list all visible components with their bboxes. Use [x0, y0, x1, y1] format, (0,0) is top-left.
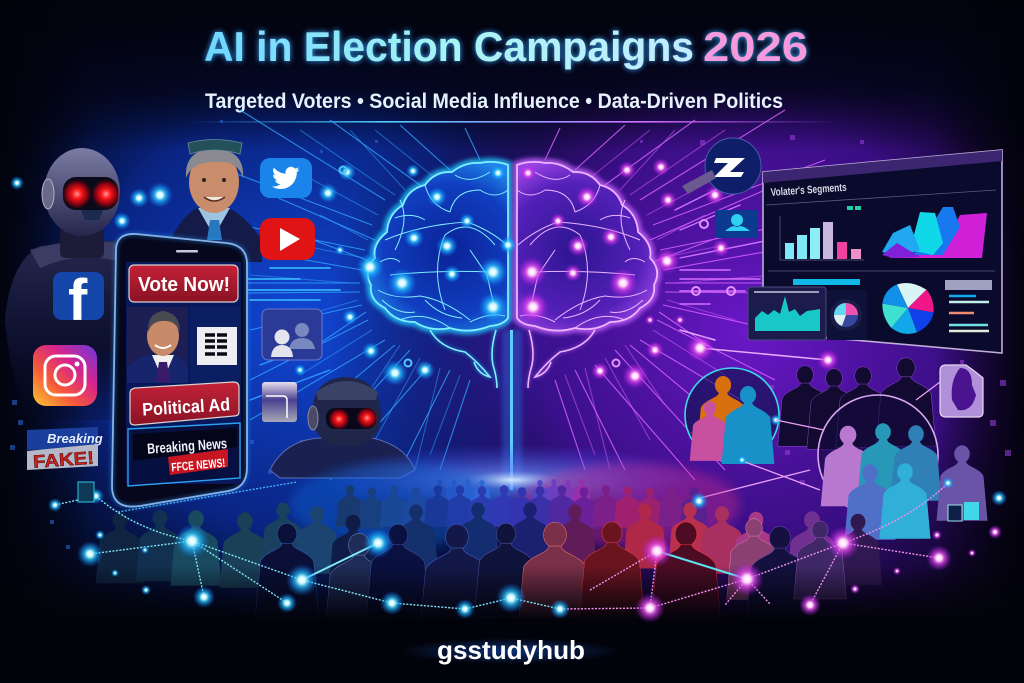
area chart — [882, 207, 987, 258]
icon: twitter — [260, 158, 312, 198]
chart legend — [945, 280, 992, 331]
banner: vote now: Vote Now! — [138, 274, 230, 296]
wordmark: gsstudyhub — [437, 635, 585, 665]
icon: misc tile — [262, 382, 297, 422]
icon: facebook: f — [68, 268, 88, 333]
crowd back rows — [336, 485, 708, 529]
crowd of voters — [96, 479, 882, 635]
voter network: pink nodes — [635, 525, 1002, 623]
badge: breaking fake — [27, 427, 103, 472]
bar chart — [780, 206, 864, 260]
sub panel: mini donut — [827, 290, 867, 340]
dashboard heading: Volater's Segments — [770, 182, 847, 199]
scattered data pixels — [10, 120, 378, 549]
connector lines, right — [700, 382, 940, 498]
icon: facebook — [53, 268, 104, 333]
icon: youtube — [260, 218, 315, 260]
radiating data rays: purple side — [545, 110, 835, 480]
horizontal light streaks — [247, 170, 828, 400]
left brain hemisphere — [368, 162, 508, 388]
dashboard: voter segments — [748, 150, 1002, 353]
robot with red eyes, left — [5, 148, 131, 420]
pie chart — [882, 283, 934, 334]
voter network: blue links — [55, 482, 560, 609]
badge: breaking fake: Breaking — [47, 431, 103, 446]
brain nodes: blue — [10, 145, 517, 386]
smartphone — [112, 234, 247, 507]
bottom fade — [0, 565, 1024, 683]
scattered data pixels, right — [640, 135, 1011, 485]
crowd front row — [255, 519, 846, 635]
candidate photo — [127, 307, 188, 383]
crowd far row — [431, 479, 591, 506]
sub panel: mini line chart — [748, 287, 826, 340]
brain nodes: purple — [517, 158, 839, 389]
icon: people tile — [262, 309, 322, 360]
candidate portrait, top — [170, 140, 262, 262]
progress bar — [793, 279, 860, 285]
title: 2026 — [703, 23, 808, 70]
radiating data rays: blue side — [190, 110, 480, 480]
title rule — [190, 121, 840, 123]
document icon — [190, 307, 241, 383]
panel: breaking news: FFCE NEWS! — [171, 456, 226, 474]
lone voter figure — [936, 445, 988, 521]
banner: vote now — [129, 265, 238, 302]
dark voter silhouettes — [778, 358, 936, 449]
robot with red eyes, centre — [270, 377, 415, 478]
subtitle: Targeted Voters • Social Media Influence • Data-Driven Politics — [205, 90, 783, 113]
crowd middle row — [96, 502, 882, 588]
horizon glow — [290, 444, 740, 547]
icon: Z badge — [682, 138, 761, 194]
voter network: blue nodes — [48, 477, 1007, 619]
title: AI in Election Campaigns — [204, 23, 694, 70]
voter group circle, large — [818, 395, 942, 540]
phone screen background — [126, 262, 241, 484]
wordmark — [400, 635, 620, 665]
icon: person tile — [715, 210, 758, 238]
central light beam — [502, 330, 522, 490]
icon: instagram — [33, 345, 97, 406]
right brain hemisphere — [517, 162, 657, 388]
banner: political ad: Political Ad — [142, 394, 231, 420]
panel: breaking news — [128, 423, 240, 486]
data ring nodes — [340, 166, 735, 366]
phone tile icon — [940, 365, 983, 417]
small chart icons — [78, 482, 979, 521]
badge: breaking fake: FAKE! — [32, 448, 95, 472]
panel: breaking news: Breaking News — [147, 436, 228, 458]
banner: political ad — [130, 382, 239, 425]
voter network: pink links — [560, 483, 948, 609]
voter group circle, small — [685, 368, 782, 465]
